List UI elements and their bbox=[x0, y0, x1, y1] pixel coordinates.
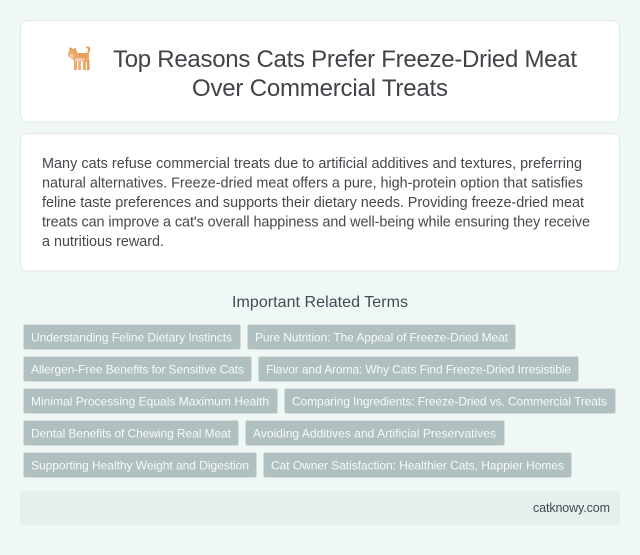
chip bbox=[258, 356, 578, 382]
chip: Dental Benefits of Chewing Real Meat bbox=[31, 426, 232, 440]
chip: Comparing Ingredients: Freeze-Dried vs. Commercial Treats bbox=[292, 394, 607, 408]
chip bbox=[24, 324, 240, 350]
chip: Supporting Healthy Weight and Digestion bbox=[31, 458, 249, 472]
footer text: site name: catknowy.com bbox=[533, 501, 610, 515]
chip bbox=[246, 420, 504, 446]
icon: cat bbox=[68, 46, 90, 70]
chip: Allergen-Free Benefits for Sensitive Cats bbox=[31, 362, 244, 376]
text block: description: a nutritious reward. bbox=[42, 234, 164, 250]
chip bbox=[24, 388, 278, 414]
title: Top Reasons Cats Prefer Freeze-Dried Meat bbox=[113, 46, 577, 73]
chip list: related terms bbox=[24, 324, 616, 478]
text block: description: natural alternatives. Freeze-dried meat offers a pure, high-protein option that satisfies bbox=[42, 176, 583, 192]
chip bbox=[24, 452, 256, 478]
panel: description bbox=[20, 134, 620, 271]
chip: Minimal Processing Equals Maximum Health bbox=[31, 394, 269, 408]
footer bbox=[20, 491, 620, 525]
heading: related terms: Important Related Terms bbox=[232, 294, 408, 311]
chip bbox=[24, 356, 252, 382]
title: Over Commercial Treats bbox=[192, 75, 448, 102]
title bbox=[113, 46, 577, 102]
chip bbox=[248, 324, 516, 350]
chip: Pure Nutrition: The Appeal of Freeze-Dried Meat bbox=[255, 330, 509, 344]
text block: description: feline taste preferences and supports their dietary needs. Providing freeze-dried meat bbox=[42, 195, 584, 211]
chip: Flavor and Aroma: Why Cats Find Freeze-Dried Irresistible bbox=[266, 362, 571, 376]
text block: description: Many cats refuse commercial treats due to artificial additives and textures, preferring bbox=[42, 156, 582, 172]
chip bbox=[284, 388, 616, 414]
chip: Understanding Feline Dietary Instincts bbox=[31, 330, 232, 344]
chip: Cat Owner Satisfaction: Healthier Cats, Happier Homes bbox=[271, 458, 564, 472]
panel: header bbox=[20, 20, 620, 122]
chip bbox=[24, 420, 238, 446]
text block: description bbox=[42, 156, 590, 250]
text block: description: treats can improve a cat's overall happiness and well-being while ensuring they receive bbox=[42, 214, 590, 230]
chip bbox=[264, 452, 572, 478]
chip: Avoiding Additives and Artificial Preservatives bbox=[253, 426, 496, 440]
